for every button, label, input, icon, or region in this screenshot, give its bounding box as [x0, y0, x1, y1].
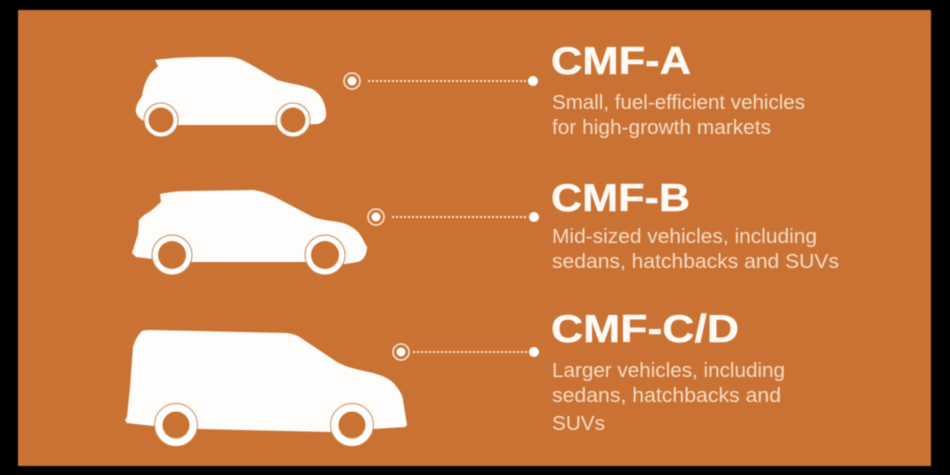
text block: CMF-B: sedans, hatchbacks and SUVs: [552, 251, 839, 273]
text block: CMF-A: [551, 40, 805, 139]
text block: CMF-B: Mid-sized vehicles, including: [552, 226, 817, 248]
connector: CMF-B: [368, 209, 539, 225]
text block: CMF-C/D: sedans, hatchbacks and: [552, 385, 781, 407]
icon: CMF-A small car: [136, 57, 326, 137]
icon: CMF-B mid-sized car: [132, 190, 367, 275]
text block: CMF-C/D: SUVs: [552, 413, 605, 435]
icon: CMF-C/D large vehicle: [125, 330, 407, 446]
connector: CMF-A: [344, 73, 538, 89]
text block: CMF-C/D: [551, 308, 785, 435]
text block: CMF-A: Small, fuel-efficient vehicles: [552, 92, 805, 114]
text block: CMF-B: CMF-B: [551, 177, 690, 220]
text block: CMF-A: for high-growth markets: [552, 117, 771, 139]
text block: CMF-C/D: Larger vehicles, including: [552, 360, 785, 382]
text block: CMF-A: CMF-A: [551, 40, 691, 83]
text block: CMF-B: [551, 177, 839, 273]
text block: CMF-C/D: CMF-C/D: [551, 308, 739, 351]
connector: CMF-C/D: [393, 344, 539, 360]
